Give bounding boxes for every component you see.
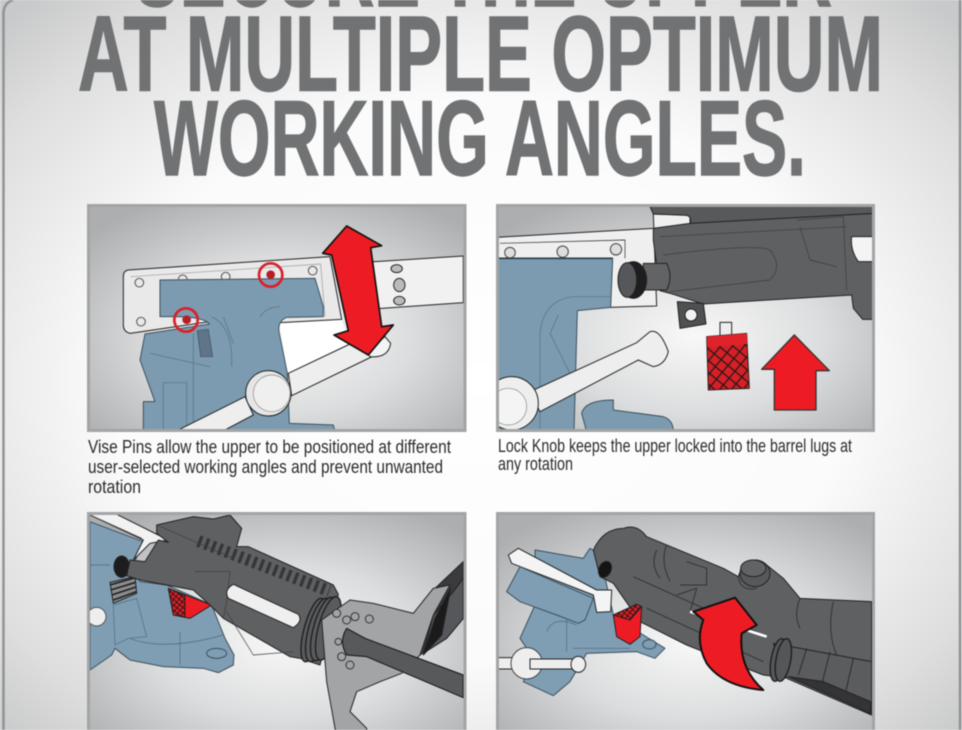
illustration: upper on vise with pins (123, 226, 463, 432)
panel: vise pins (87, 204, 466, 497)
illustration: lock knob and upper (485, 205, 875, 432)
pin markers (174, 263, 282, 332)
panel border (88, 514, 465, 730)
knob (718, 321, 733, 336)
panel: lock knob (485, 204, 875, 474)
caption: user-selected working angles and prevent unwanted (88, 456, 443, 477)
caption: Lock Knob keeps the upper locked into the barrel lugs at (498, 435, 852, 456)
caption: Vise Pins allow the upper to be positioned at different (88, 436, 451, 457)
up arrow (762, 335, 829, 410)
panel background (496, 512, 875, 730)
panel background (87, 204, 466, 431)
panel background (496, 204, 875, 431)
caption (498, 435, 852, 474)
title (78, 0, 883, 198)
panel border (498, 206, 874, 430)
panel background (87, 512, 466, 730)
panel: wrench on barrel nut (87, 512, 466, 730)
curved arrow (693, 598, 763, 690)
caption (88, 436, 451, 497)
caption: rotation (88, 476, 141, 497)
illustration: upper and wrench (87, 514, 463, 730)
illustration: rotated upper with scope (498, 527, 872, 715)
panel border (498, 514, 874, 730)
wrench (420, 562, 463, 655)
caption: any rotation (498, 453, 573, 474)
panel: rotated upper with scope (496, 512, 875, 730)
double arrow (323, 226, 393, 355)
panel border (88, 206, 465, 430)
knob (613, 604, 642, 644)
